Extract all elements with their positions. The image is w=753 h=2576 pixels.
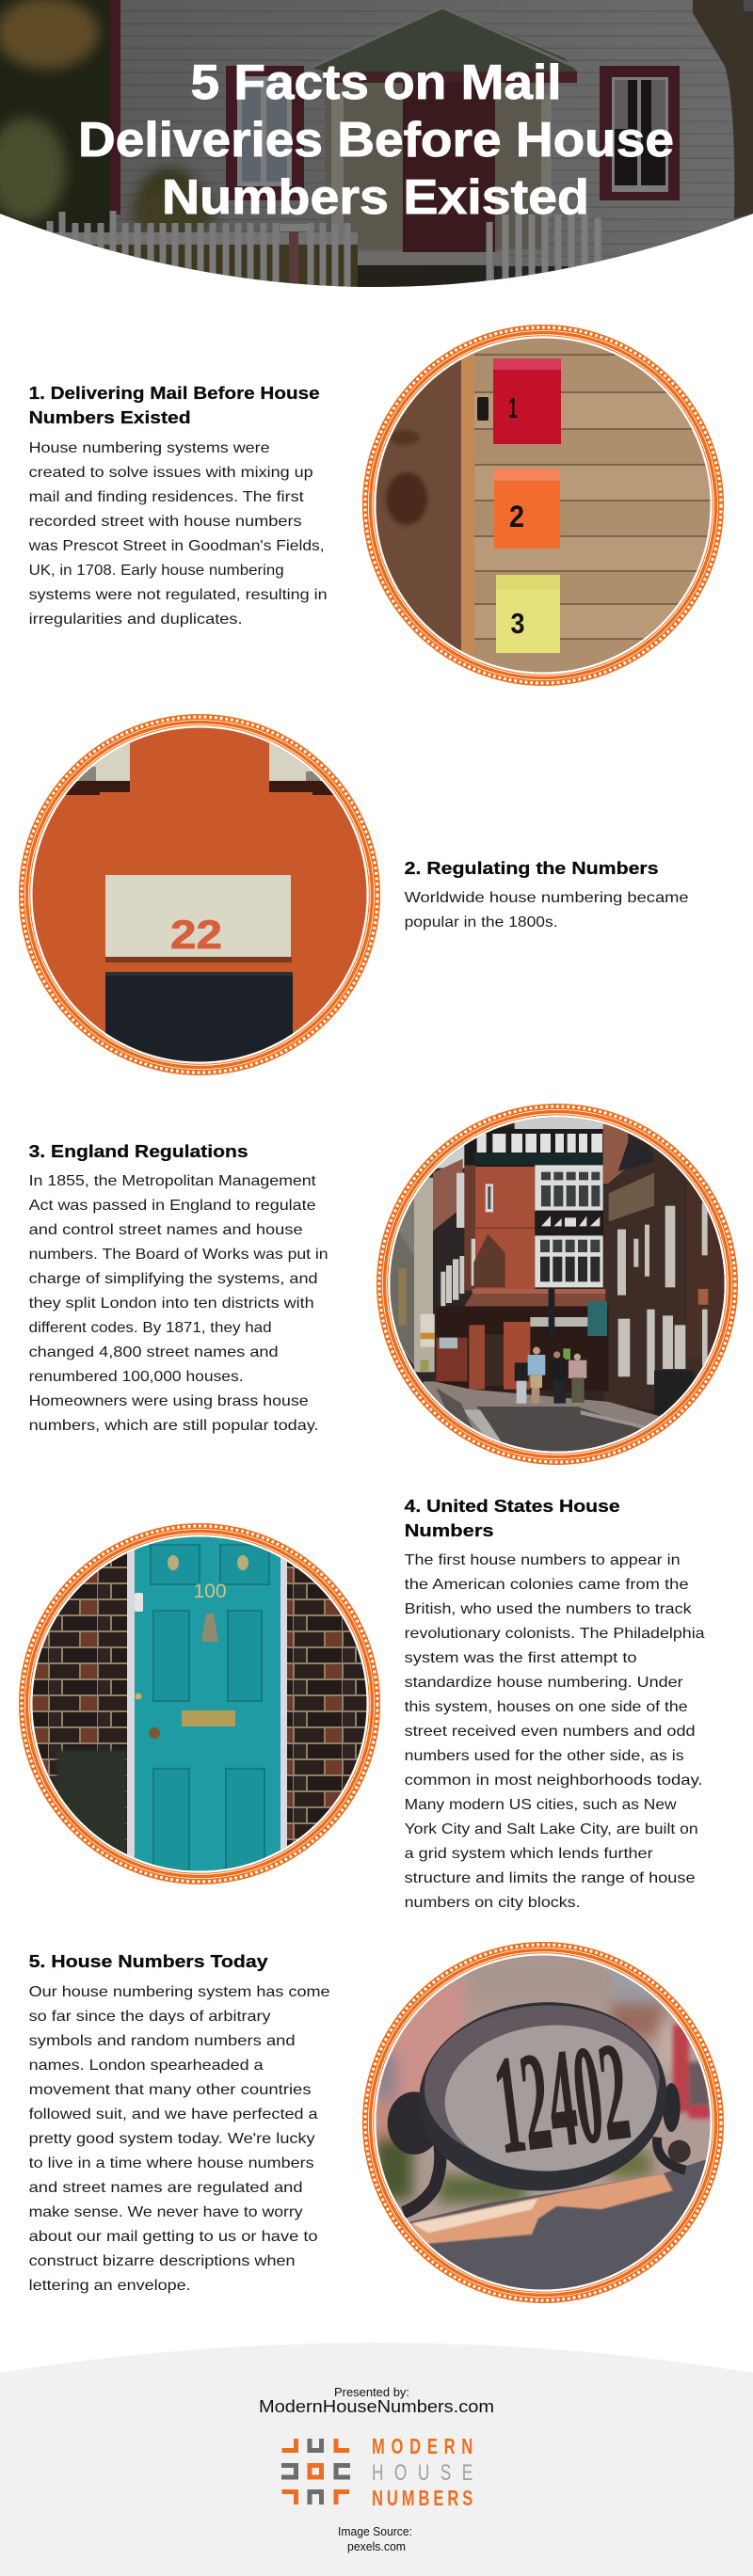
picket fence left <box>47 211 358 287</box>
header photo: house front <box>0 0 753 301</box>
decorative ring 2 <box>22 717 377 1073</box>
body text 3: renumbered 100,000 houses. <box>29 1369 244 1385</box>
body text 3: In 1855, the Metropolitan Management <box>29 1173 316 1189</box>
pedestrians <box>421 1347 586 1404</box>
body text 5: make sense. We never have to worry <box>29 2204 303 2220</box>
heading 1: Numbers Existed <box>29 407 191 427</box>
body text 5: symbols and random numbers and <box>29 2033 296 2049</box>
body text 5: names. London spearheaded a <box>29 2058 264 2074</box>
heading 5: 5. House Numbers Today <box>29 1951 268 1971</box>
heading 4 <box>405 1496 620 1540</box>
body text 4: Many modern US cities, such as New <box>405 1797 677 1813</box>
body text 4: a grid system which lends further <box>405 1846 653 1862</box>
body text 5: followed suit, and we have perfected a <box>29 2107 318 2123</box>
panel: fact 3 text <box>29 1141 328 1434</box>
body text 1: recorded street with house numbers <box>29 514 302 530</box>
body text 4: the American colonies came from the <box>405 1577 689 1593</box>
body text 1: created to solve issues with mixing up <box>29 465 313 481</box>
body text 5: construct bizarre descriptions when <box>29 2253 296 2269</box>
body text 5: about our mail getting to us or have to <box>29 2229 318 2245</box>
heading 1: 1. Delivering Mail Before House <box>29 383 320 403</box>
sky and distant pale buildings <box>390 1138 476 1372</box>
right window <box>600 66 680 200</box>
red building <box>673 2025 711 2119</box>
logo wordmark <box>372 2435 473 2511</box>
body text 4: numbers on city blocks. <box>405 1895 581 1911</box>
timber band <box>535 1211 603 1235</box>
body text 4: standardize house numbering. Under <box>405 1675 683 1691</box>
body text 2: popular in the 1800s. <box>405 914 558 930</box>
photo: brick street corner <box>379 1106 735 1462</box>
oval plate <box>412 1994 673 2199</box>
panel: fact 2 text <box>405 858 689 930</box>
body text 4: revolutionary colonists. The Philadelphia <box>405 1626 705 1642</box>
body text 2: Worldwide house numbering became <box>405 890 689 906</box>
image source: Image Source: <box>338 2525 412 2538</box>
door fittings: 100 <box>193 1581 227 1602</box>
orange mailbox <box>494 469 560 549</box>
scroll brackets <box>388 2083 691 2213</box>
body text 3 <box>29 1173 328 1434</box>
yellow mailbox <box>496 575 560 653</box>
right brick building <box>604 1143 731 1409</box>
heading 2: 2. Regulating the Numbers <box>405 858 659 878</box>
heading 4: Numbers <box>405 1520 494 1540</box>
panel: fact 4 text <box>405 1496 705 1911</box>
body text 3: charge of simplifying the systems, and <box>29 1271 318 1287</box>
porch wall and door <box>325 72 577 294</box>
image source: pexels.com <box>347 2540 406 2553</box>
decorative ring 5 <box>365 1945 721 2300</box>
website: ModernHouseNumbers.com <box>259 2397 494 2416</box>
body text 5: pretty good system today. We're lucky <box>29 2131 315 2147</box>
pipe rail <box>409 2160 706 2290</box>
body text 1: irregularities and duplicates. <box>29 612 243 628</box>
body text 3: they split London into ten districts with <box>29 1296 314 1312</box>
dark window <box>105 972 293 1066</box>
door fittings <box>135 1555 248 1739</box>
body text 1: UK, in 1708. Early house numbering <box>29 563 284 579</box>
number plaque: 22 <box>170 913 222 958</box>
left timbered row <box>433 1159 465 1315</box>
body text 3: numbers. The Board of Works was put in <box>29 1247 328 1263</box>
photo: orange wall with number 22 <box>22 717 377 1073</box>
panel: fact 1 text <box>28 383 328 628</box>
right brick sliver <box>603 1124 628 1184</box>
body text 4: common in most neighborhoods today. <box>405 1773 703 1789</box>
heading 4: 4. United States House <box>405 1496 620 1516</box>
body text 1: House numbering systems were <box>29 440 270 456</box>
body text 1: was Prescot Street in Goodman's Fields, <box>28 538 325 554</box>
door panels <box>151 1545 269 1870</box>
body text 3: numbers, which are still popular today. <box>29 1418 319 1434</box>
shopfront <box>421 1289 609 1391</box>
logo wordmark: MODERN <box>372 2435 473 2459</box>
body text 3: changed 4,800 street names and <box>29 1344 279 1360</box>
body text 1: systems were not regulated, resulting in <box>29 587 328 603</box>
photo: three numbered mailboxes: 3 <box>510 607 525 640</box>
body text 3: Homeowners were using brass house <box>29 1393 309 1409</box>
white bay window upper <box>535 1165 603 1211</box>
blurred background <box>375 1952 682 2203</box>
heading 1 <box>29 383 320 427</box>
heading 3: 3. England Regulations <box>29 1141 248 1161</box>
footer panel <box>0 2343 753 2576</box>
panel: fact 5 text <box>29 1951 330 2294</box>
image source <box>338 2525 412 2553</box>
body text 5: to live in a time where house numbers <box>29 2155 314 2171</box>
logo wordmark: HOUSE <box>372 2460 473 2486</box>
decorative ring 4 <box>22 1526 377 1882</box>
body text 4: The first house numbers to appear in <box>405 1552 681 1568</box>
body text 3: and control street names and house <box>29 1222 303 1238</box>
red corner trim <box>110 0 120 215</box>
title: Deliveries Before House <box>78 113 674 167</box>
red mailbox <box>493 358 561 444</box>
photo: three numbered mailboxes <box>365 327 721 683</box>
body text 5: so far since the days of arbitrary <box>29 2009 271 2025</box>
brick tower <box>464 1165 535 1291</box>
body text 5: movement that many other countries <box>29 2082 312 2098</box>
title <box>78 56 674 225</box>
number plaque <box>105 875 292 962</box>
pavement and cobbles <box>424 1381 659 1451</box>
photo: three numbered mailboxes: 2 <box>509 500 524 533</box>
body text 4: British, who used the numbers to track <box>405 1601 693 1617</box>
tree trunk at right <box>693 0 753 218</box>
decorative ring 1 <box>365 327 721 683</box>
body text 4: structure and limits the range of house <box>405 1870 696 1886</box>
presented by: Presented by: <box>334 2385 409 2399</box>
title: Numbers Existed <box>162 170 589 225</box>
white bay window lower <box>535 1235 603 1287</box>
body text 4: numbers used for the other side, as is <box>405 1748 684 1764</box>
body text 5 <box>29 1984 330 2294</box>
photo: teal front door <box>22 1526 377 1882</box>
body text 4: system was the first attempt to <box>405 1650 637 1666</box>
trees on the left <box>0 0 205 250</box>
body text 5: Our house numbering system has come <box>29 1984 330 2000</box>
body text 3: different codes. By 1871, they had <box>29 1320 272 1336</box>
body text 4: street received even numbers and odd <box>405 1724 696 1740</box>
top timbered storey <box>464 1115 604 1167</box>
body text 4: York City and Salt Lake City, are built on <box>405 1821 698 1837</box>
body text 5: and street names are regulated and <box>29 2180 303 2196</box>
body text 4: this system, houses on one side of the <box>405 1699 688 1715</box>
porch roof <box>311 8 577 72</box>
logo wordmark: NUMBERS <box>372 2487 473 2511</box>
beige ledges <box>66 743 333 795</box>
body text 1 <box>28 440 328 628</box>
title: 5 Facts on Mail <box>190 56 561 110</box>
photo: three numbered mailboxes: 1 <box>508 391 518 424</box>
photo: oval 12402 number sign <box>365 1945 721 2300</box>
body text 1: mail and finding residences. The first <box>29 489 304 505</box>
body text 4 <box>405 1552 705 1911</box>
body text 3: Act was passed in England to regulate <box>29 1198 316 1214</box>
bin <box>654 1371 694 1414</box>
shrub behind fence <box>132 183 216 240</box>
decorative ring 3 <box>379 1106 735 1462</box>
left window <box>226 66 304 200</box>
picket fence right <box>486 215 601 280</box>
logo icon <box>281 2439 350 2504</box>
body text 2 <box>405 890 689 930</box>
body text 5: lettering an envelope. <box>29 2278 191 2294</box>
